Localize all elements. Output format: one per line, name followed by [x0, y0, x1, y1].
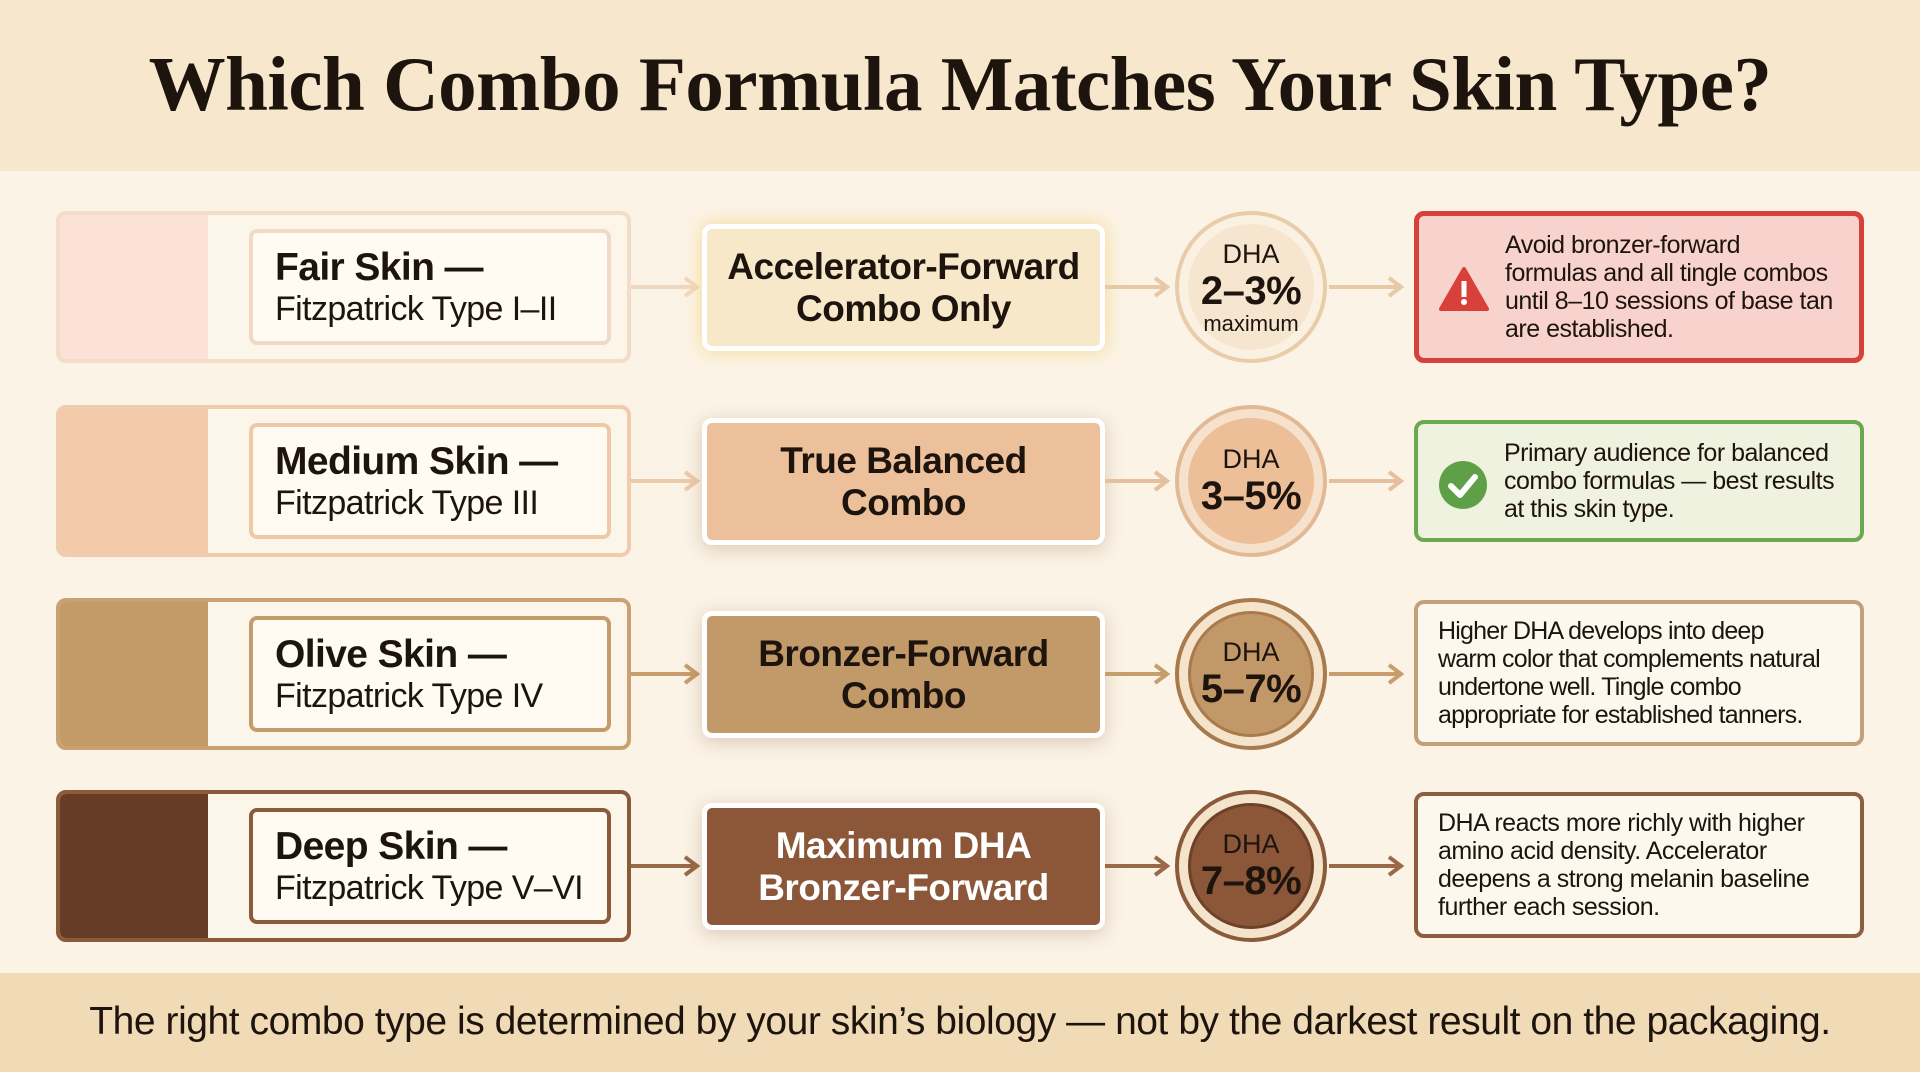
skin card: deep: Deep Skin —	[275, 825, 507, 868]
row: deep skin	[56, 790, 1864, 942]
skin card: medium: Fitzpatrick Type III	[275, 484, 538, 522]
skin card: fair: Fair Skin —	[275, 246, 483, 289]
formula box: bronzer-forward	[702, 611, 1105, 738]
DHA circle 3-5%	[1175, 405, 1327, 557]
DHA circle 2-3%: maximum	[1203, 311, 1299, 336]
arrow	[631, 470, 700, 492]
note: olive: undertone well. Tingle combo	[1438, 673, 1741, 701]
arrow	[1329, 276, 1404, 298]
DHA circle 5-7%: 5–7%	[1201, 667, 1301, 711]
arrow	[1105, 855, 1170, 877]
formula box: maximum DHA: Maximum DHA	[776, 824, 1031, 866]
warning note: Avoid bronzer-forward	[1505, 231, 1740, 259]
skin card: fair: Fitzpatrick Type I–II	[275, 290, 557, 328]
note: deep: amino acid density. Accelerator	[1438, 837, 1767, 865]
DHA circle 7-8%	[1175, 790, 1327, 942]
formula box: bronzer-forward: Combo	[841, 674, 966, 716]
skin card: medium: Medium Skin —	[275, 440, 558, 483]
arrow	[1329, 664, 1404, 684]
success note: Primary audience for balanced	[1504, 439, 1829, 467]
DHA circle 2-3%	[1175, 211, 1327, 363]
DHA circle 7-8%: 7–8%	[1201, 859, 1301, 903]
row: olive skin	[56, 598, 1864, 750]
row: medium skin	[56, 405, 1864, 558]
formula box: maximum DHA: Bronzer-Forward	[758, 866, 1049, 908]
note: deep: DHA reacts more richly with higher	[1438, 809, 1804, 837]
formula box: true balanced: True Balanced	[780, 440, 1027, 480]
footer band	[0, 973, 1920, 1072]
arrow	[631, 855, 700, 877]
warning note: are established.	[1505, 315, 1674, 343]
success note: combo formulas — best results	[1504, 467, 1834, 495]
success note	[1414, 420, 1864, 542]
skin card: medium	[56, 405, 631, 557]
formula box: accelerator-forward: Accelerator-Forward	[727, 246, 1080, 286]
DHA circle 3-5%: DHA	[1222, 444, 1280, 474]
formula box: accelerator-forward: Combo Only	[796, 288, 1011, 328]
formula box: bronzer-forward: Bronzer-Forward	[758, 632, 1049, 674]
skin card: olive: Fitzpatrick Type IV	[275, 677, 543, 715]
DHA circle 2-3%: 2–3%	[1201, 269, 1301, 313]
note: olive	[1414, 600, 1864, 746]
header band	[0, 0, 1920, 171]
skin card: deep: Fitzpatrick Type V–VI	[275, 869, 583, 907]
note: deep: further each session.	[1438, 893, 1660, 921]
DHA circle 7-8%: DHA	[1222, 829, 1280, 859]
note: olive: Higher DHA develops into deep	[1438, 617, 1764, 645]
title: Which Combo Formula Matches Your Skin Type?	[149, 41, 1771, 127]
arrow	[1105, 664, 1170, 684]
formula box: true balanced: Combo	[841, 482, 966, 522]
warning note: formulas and all tingle combos	[1505, 259, 1828, 287]
skin card: deep	[56, 790, 631, 942]
DHA circle 3-5%: 3–5%	[1201, 474, 1301, 518]
note: olive: warm color that complements natural	[1438, 645, 1820, 673]
footer text: The right combo type is determined by your skin’s biology — not by the darkest result on the packaging.	[89, 1000, 1831, 1043]
formula box: true balanced	[702, 418, 1105, 545]
DHA circle 2-3%: DHA	[1222, 239, 1280, 269]
arrow	[631, 276, 700, 298]
warning note: until 8–10 sessions of base tan	[1505, 287, 1833, 315]
note: deep	[1414, 792, 1864, 938]
arrow	[1105, 470, 1170, 492]
formula box: maximum DHA	[702, 803, 1105, 930]
warning note	[1414, 211, 1864, 363]
success note: at this skin type.	[1504, 495, 1674, 523]
arrow	[1329, 855, 1404, 877]
note: olive: appropriate for established tanners.	[1438, 701, 1802, 729]
row: fair skin	[56, 211, 1864, 363]
skin card: olive	[56, 598, 631, 750]
icon: check	[1439, 461, 1487, 509]
icon: warning	[1439, 266, 1489, 311]
formula box: accelerator-forward	[702, 224, 1105, 351]
note: deep: deepens a strong melanin baseline	[1438, 865, 1809, 893]
skin card: olive: Olive Skin —	[275, 633, 506, 676]
arrow	[1329, 470, 1404, 492]
skin card: fair	[56, 211, 631, 363]
arrow	[631, 664, 700, 684]
arrow	[1105, 276, 1170, 298]
DHA circle 5-7%: DHA	[1222, 637, 1280, 667]
DHA circle 5-7%	[1175, 598, 1327, 750]
